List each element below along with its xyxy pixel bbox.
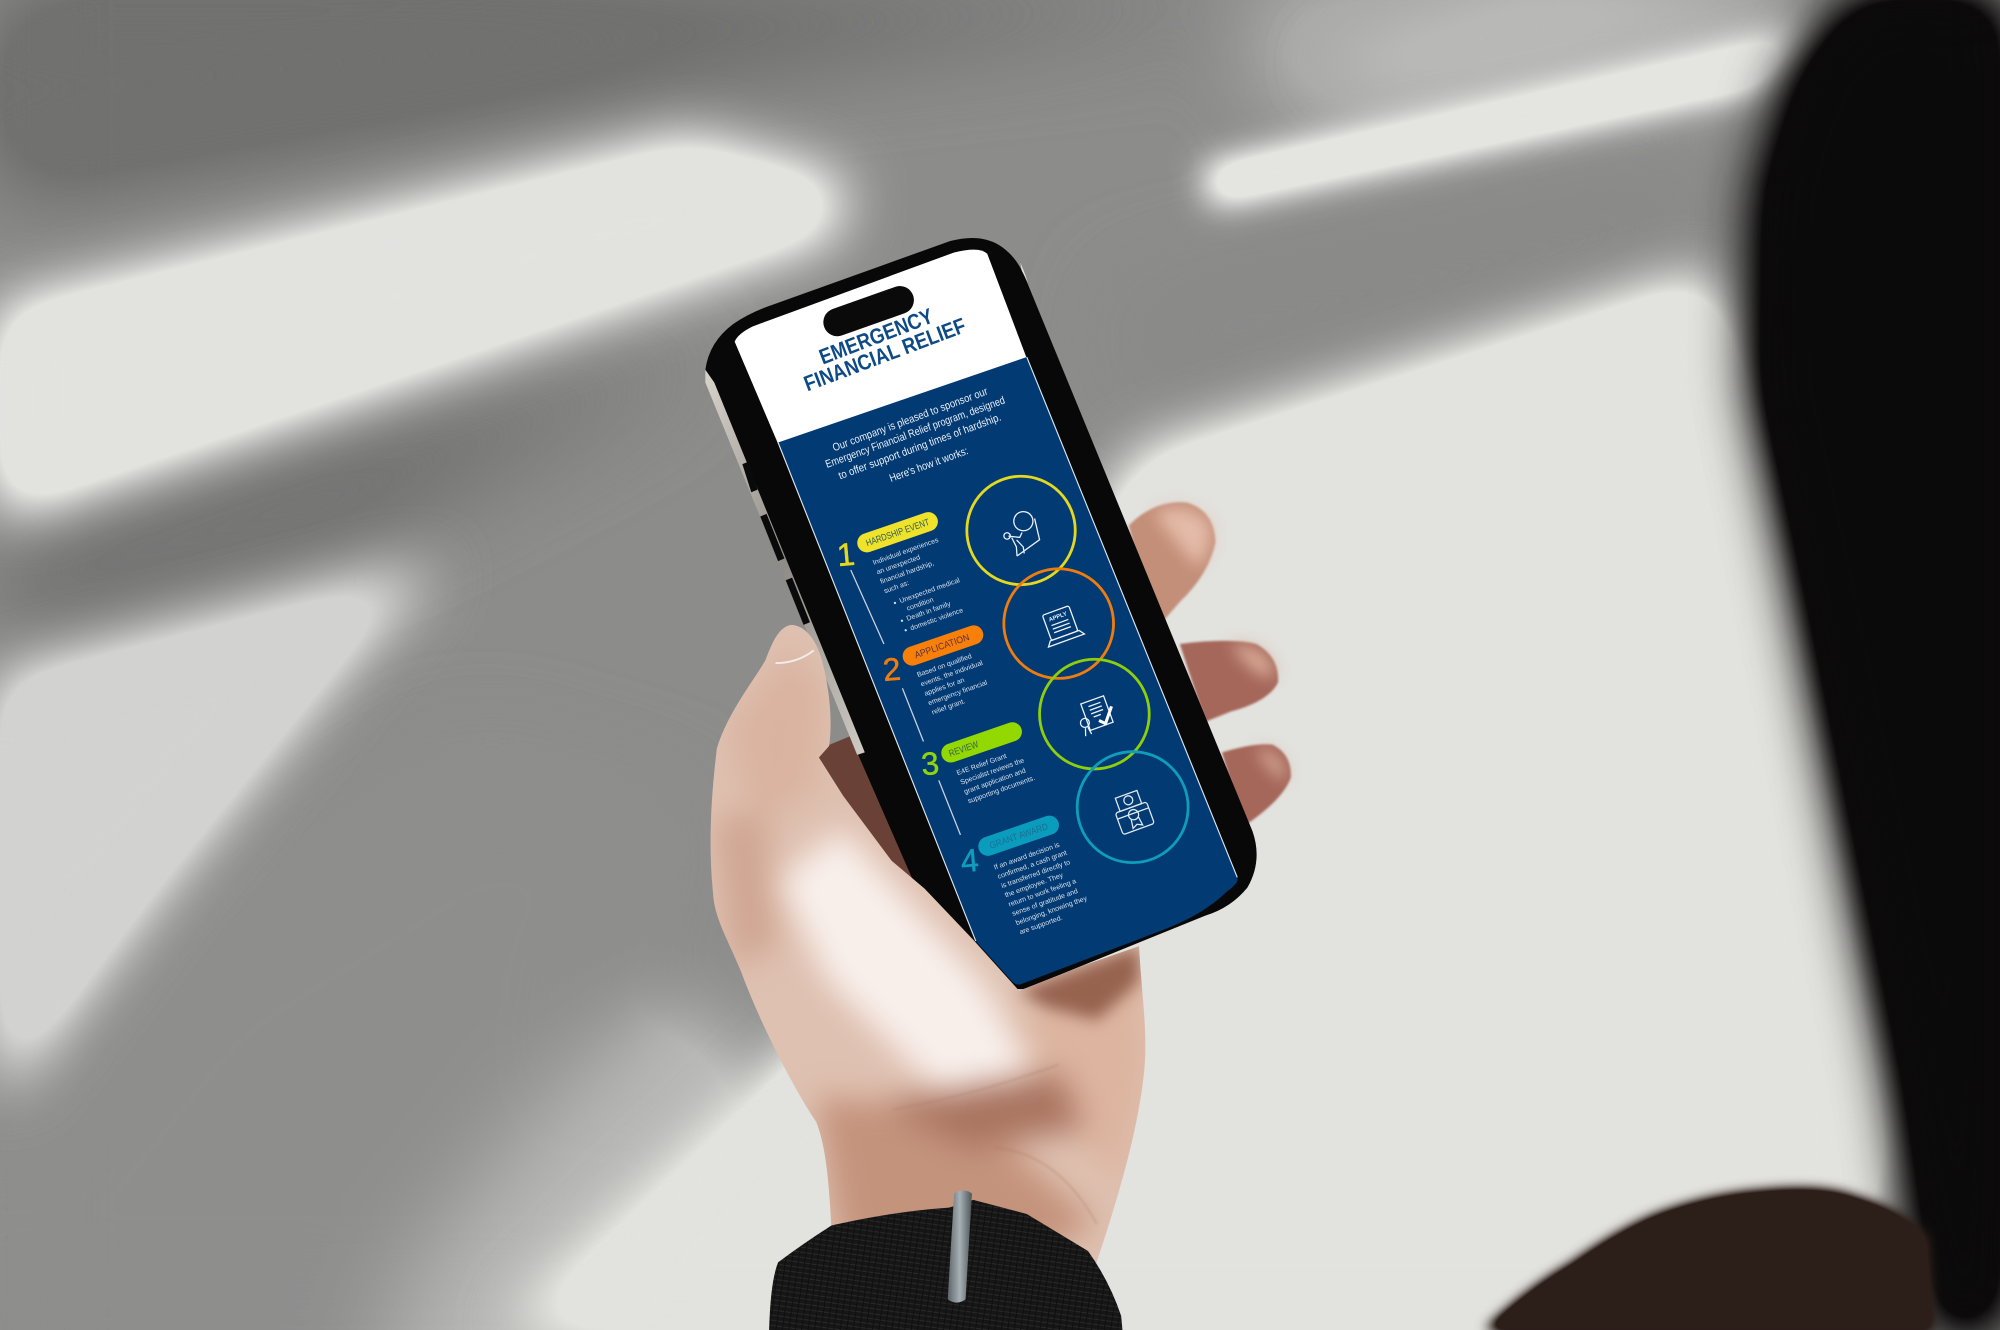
phone bbox=[705, 238, 1257, 989]
phone body bbox=[705, 238, 1257, 989]
screen blue panel bbox=[778, 357, 1238, 985]
body copy: E4E Relief Grant bbox=[956, 753, 1008, 777]
step 1: hardship event bbox=[835, 510, 972, 644]
body copy: If an award decision is bbox=[993, 842, 1061, 872]
body copy: financial hardship, bbox=[879, 560, 935, 586]
bullet list: domestic violence bbox=[909, 607, 964, 632]
body copy: applies for an bbox=[924, 677, 966, 698]
icon: laptop apply: APPLY bbox=[1048, 611, 1068, 623]
connector line bbox=[939, 780, 960, 835]
intro text: to offer support during times of hardship. bbox=[837, 412, 1003, 482]
body copy bbox=[993, 840, 1092, 936]
person silhouette foreground bbox=[1760, 0, 2000, 1330]
forearm of viewer bbox=[1486, 1190, 1932, 1330]
step 2: application bbox=[881, 623, 995, 742]
pill: HARDSHIP EVENT bbox=[864, 516, 931, 548]
middle finger bbox=[1180, 641, 1278, 722]
icon: grant award bbox=[1111, 789, 1154, 835]
fingers behind phone bbox=[1129, 502, 1291, 826]
number 4: 4 bbox=[959, 842, 980, 879]
body copy: Specialist reviews the bbox=[960, 757, 1026, 787]
ring finger bbox=[1222, 744, 1291, 826]
icon: person pushing boulder bbox=[998, 508, 1045, 558]
bullet list bbox=[893, 577, 972, 634]
icon: laptop apply bbox=[1038, 604, 1084, 647]
hand palm and thumb bbox=[710, 625, 1146, 1264]
body copy: are supported. bbox=[1019, 915, 1064, 936]
number 3: 3 bbox=[920, 745, 940, 782]
index finger bbox=[1129, 502, 1216, 631]
body copy bbox=[916, 650, 995, 716]
body copy: Based on qualified bbox=[916, 653, 973, 679]
pill: GRANT AWARD bbox=[988, 820, 1049, 851]
bullet list: condition bbox=[906, 597, 935, 613]
camera pill bbox=[819, 282, 918, 340]
body copy: grant application and bbox=[963, 768, 1027, 796]
number 2: 2 bbox=[881, 651, 902, 688]
body copy: is transferred directly to bbox=[1000, 859, 1072, 890]
connector line bbox=[902, 688, 923, 742]
step 4: grant award bbox=[959, 813, 1092, 936]
intro text: Our company is pleased to sponsor our bbox=[831, 386, 990, 454]
watch band bbox=[769, 1190, 1122, 1330]
body copy: emergency financial bbox=[927, 680, 989, 707]
screen edge lines bbox=[778, 357, 1237, 941]
bullet list: Unexpected medical bbox=[899, 577, 961, 605]
body copy bbox=[956, 747, 1036, 805]
watch metal loop bbox=[948, 1190, 972, 1303]
title: EMERGENCY bbox=[816, 303, 937, 369]
body copy: supporting documents. bbox=[967, 775, 1036, 805]
title: FINANCIAL RELIEF bbox=[800, 313, 969, 396]
side buttons bbox=[742, 462, 810, 625]
intro text: Emergency Financial Relief program, designed bbox=[824, 395, 1007, 471]
body copy: an unexpected bbox=[876, 554, 922, 576]
body copy: belonging, knowing they bbox=[1015, 895, 1089, 927]
body copy: relief grant. bbox=[931, 698, 967, 716]
step 3: review bbox=[920, 720, 1036, 835]
body copy: confirmed, a cash grant bbox=[997, 850, 1068, 881]
screen white header bbox=[735, 250, 1027, 444]
metal side frame bbox=[705, 370, 865, 755]
body copy bbox=[872, 537, 951, 595]
connector line bbox=[851, 570, 884, 644]
pill: APPLICATION bbox=[913, 631, 971, 660]
body copy: the employee. They bbox=[1004, 872, 1065, 899]
body copy: sense of gratitude and bbox=[1011, 888, 1079, 918]
body copy: return to work feeling a bbox=[1008, 878, 1077, 909]
body copy: such as: bbox=[883, 580, 910, 595]
pill: REVIEW bbox=[947, 738, 980, 759]
dark skin between thumb and phone bbox=[811, 733, 925, 893]
body copy: events, the individual bbox=[920, 660, 984, 688]
ring: step circles bbox=[967, 476, 1188, 863]
icon: document review bbox=[1074, 694, 1118, 736]
bullet list: Death in family bbox=[906, 601, 952, 623]
number 1: 1 bbox=[835, 536, 856, 573]
body copy: Individual experiences bbox=[872, 537, 940, 567]
intro text: Here's how it works: bbox=[888, 445, 970, 485]
